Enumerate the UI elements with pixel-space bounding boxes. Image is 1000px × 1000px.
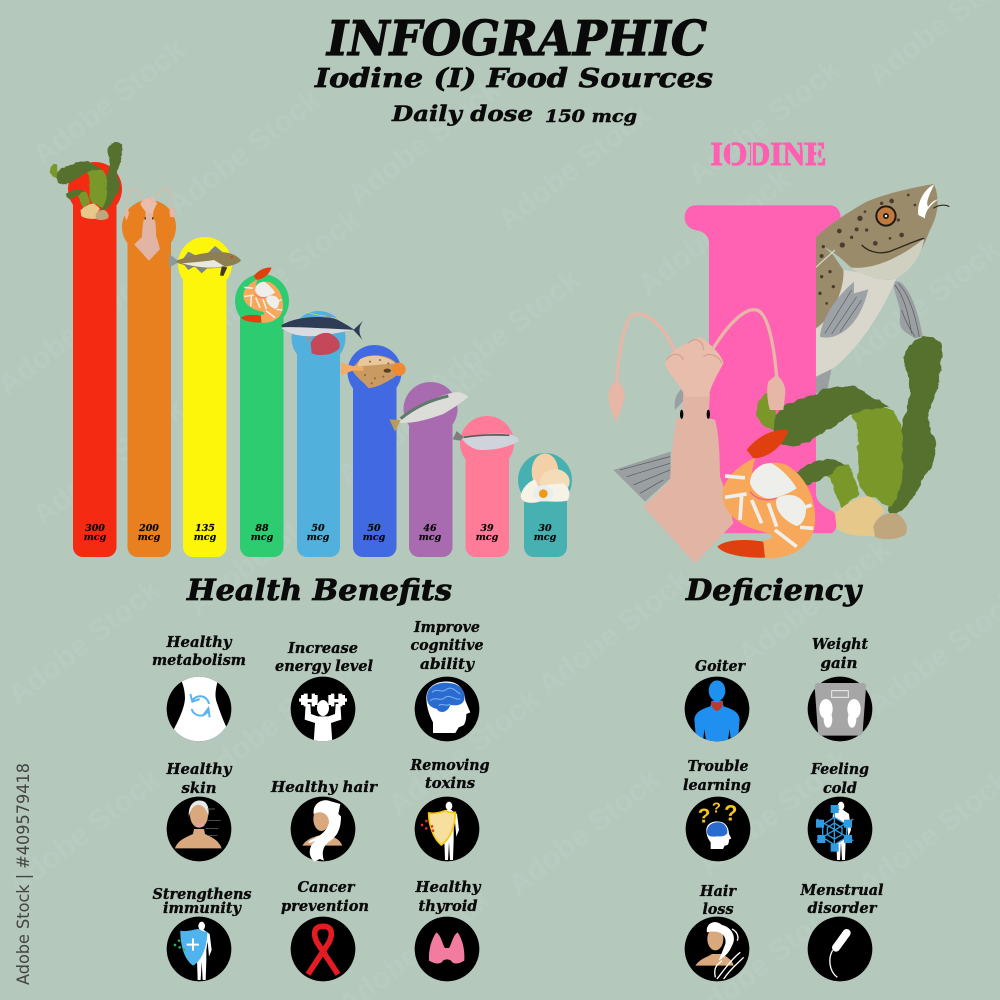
- icon: confused brain: ?: [724, 801, 737, 826]
- icon: woman with hair: [291, 797, 355, 862]
- label: removing toxins: toxins: [425, 775, 475, 792]
- label: hair loss: loss: [702, 901, 734, 918]
- daily dose label: Daily dose: [391, 101, 533, 126]
- label: menstrual disorder: [800, 882, 884, 917]
- icon: awareness ribbon: [291, 917, 355, 981]
- bar chart: iodine content of foods: [68, 162, 572, 557]
- label: trouble learning: [683, 758, 751, 794]
- bar: flounder 50 mcg: mcg: [363, 532, 386, 543]
- icon: small tuna with steak: [282, 312, 363, 355]
- watermark pattern: Adobe Stock: [162, 83, 327, 222]
- label: removing toxins: Removing: [410, 757, 490, 774]
- watermark pattern: Adobe Stock: [182, 483, 347, 622]
- icon: face and skin: [167, 797, 231, 861]
- label: goiter: Goiter: [695, 658, 746, 675]
- bar: mackerel 46 mcg: [404, 382, 458, 557]
- icon: confused brain: ?: [698, 804, 710, 827]
- icon: toxin shield: [415, 797, 479, 861]
- label: trouble learning: learning: [683, 777, 751, 794]
- bar: shrimp 88 mcg: [235, 274, 289, 557]
- bar: flounder 50 mcg: 50: [367, 523, 381, 534]
- label: cancer prevention: Cancer: [298, 879, 356, 896]
- watermark pattern: Adobe Stock: [192, 653, 357, 792]
- label: improve cognitive ability: cognitive: [410, 637, 484, 654]
- label: healthy thyroid: thyroid: [418, 898, 478, 915]
- icon: confused brain: [686, 797, 750, 861]
- watermark pattern: Adobe Stock: [342, 73, 507, 212]
- label: improve cognitive ability: ability: [420, 656, 476, 673]
- watermark pattern: Adobe Stock: [2, 763, 167, 902]
- bar: eggs 30 mcg: [518, 453, 572, 557]
- heading: IODINE: IODINE: [710, 136, 826, 173]
- illustration: letter I with iodine foods: [608, 184, 949, 563]
- bar: tuna 50 mcg: 50: [311, 523, 325, 534]
- label: healthy thyroid: [414, 879, 482, 915]
- bar: seaweed 300 mcg: 300: [85, 523, 105, 534]
- heading: Deficiency: Deficiency: [685, 573, 863, 607]
- label: trouble learning: Trouble: [688, 758, 748, 775]
- bar: mackerel 46 mcg: mcg: [419, 532, 442, 543]
- title: INFOGRAPHIC: [325, 11, 707, 67]
- label: feeling cold: Feeling: [810, 761, 869, 778]
- icon: goiter: [685, 677, 749, 742]
- icon: thyroid: [415, 917, 479, 981]
- label: healthy hair: Healthy hair: [270, 779, 378, 796]
- icon: woman losing hair: [685, 917, 749, 981]
- label: healthy skin: skin: [182, 780, 216, 797]
- watermark pattern: Adobe Stock: [332, 353, 497, 492]
- label: healthy metabolism: metabolism: [152, 652, 246, 669]
- label: improve cognitive ability: [410, 619, 484, 673]
- large squid: [608, 310, 785, 563]
- watermark pattern: Adobe Stock: [202, 203, 367, 342]
- label: healthy metabolism: Healthy: [165, 634, 233, 651]
- watermark pattern: Adobe Stock: [422, 263, 587, 402]
- label: healthy metabolism: [152, 634, 246, 669]
- bar: herring 39 mcg: mcg: [476, 532, 499, 543]
- watermark pattern: Adobe Stock: [382, 683, 547, 822]
- label: hair loss: [699, 883, 737, 918]
- label: strengthens immunity: immunity: [163, 900, 243, 917]
- icon: small mackerel: [389, 392, 468, 432]
- label: strengthens immunity: Strengthens: [152, 886, 252, 903]
- fish tail and lower fin: [613, 387, 687, 502]
- watermark pattern: Adobe Stock: [692, 743, 857, 882]
- watermark pattern: Adobe Stock: [2, 573, 167, 712]
- bar: eggs 30 mcg: 30: [538, 523, 552, 534]
- bar: eggs 30 mcg: mcg: [534, 532, 557, 543]
- watermark pattern: Adobe Stock: [732, 533, 897, 672]
- label: menstrual disorder: disorder: [808, 900, 878, 917]
- bar: shrimp 88 mcg: 88: [255, 523, 269, 534]
- label: weight gain: [812, 636, 868, 672]
- label: hair loss: Hair: [699, 883, 737, 900]
- watermark pattern: Adobe Stock: [27, 33, 192, 172]
- icon: confused brain: ?: [712, 800, 721, 816]
- icon: small squid: [124, 188, 175, 261]
- bar: squid 200 mcg: 200: [138, 523, 159, 534]
- bar: shrimp 88 mcg: mcg: [251, 532, 274, 543]
- panel: health benefits: [152, 619, 490, 981]
- label: healthy skin: [165, 761, 233, 797]
- bar: seaweed 300 mcg: [68, 162, 122, 557]
- label: cancer prevention: [281, 879, 369, 915]
- watermark pattern: Adobe Stock: [682, 53, 847, 192]
- icon: head with brain: [415, 677, 479, 741]
- bar: cod 135 mcg: 135: [195, 523, 215, 534]
- large shrimp: [717, 430, 815, 558]
- label: feeling cold: [810, 761, 869, 797]
- label: increase energy level: [275, 640, 373, 675]
- label: strengthens immunity: [152, 886, 252, 917]
- large seaweed: [757, 336, 942, 539]
- label: increase energy level: Increase: [287, 640, 358, 657]
- bar: mackerel 46 mcg: 46: [423, 523, 437, 534]
- icon: metabolism: [167, 676, 231, 742]
- panel: deficiency: [683, 636, 884, 981]
- label: removing toxins: [410, 757, 490, 792]
- bar: tuna 50 mcg: [292, 311, 346, 557]
- icon: tampon: [808, 917, 872, 981]
- icon: small cod: [169, 246, 241, 276]
- watermark pattern: Adobe Stock: [27, 393, 192, 532]
- icon: weightlifter: [291, 677, 355, 742]
- label: weight gain: Weight: [812, 636, 868, 653]
- watermark pattern: Adobe Stock: [632, 163, 797, 302]
- bar: tuna 50 mcg: mcg: [307, 532, 330, 543]
- label: menstrual disorder: Menstrual: [800, 882, 884, 899]
- icon: bathroom scale: [808, 677, 872, 741]
- bar: squid 200 mcg: [122, 200, 176, 557]
- source credit: Adobe Stock | #409579418: [14, 763, 34, 985]
- large fish: [816, 184, 949, 393]
- bar: herring 39 mcg: 39: [480, 523, 494, 534]
- big letter I: [685, 205, 841, 533]
- label: increase energy level: energy level: [275, 658, 373, 675]
- daily dose value: 150 mcg: [545, 107, 637, 127]
- subtitle: Iodine (I) Food Sources: [314, 64, 713, 94]
- icon: immunity shield: [167, 917, 231, 981]
- icon: small eggs: [521, 453, 570, 503]
- bar: cod 135 mcg: [178, 237, 232, 557]
- label: weight gain: gain: [820, 655, 858, 672]
- icon: small herring: [453, 431, 519, 450]
- bar: flounder 50 mcg: [348, 345, 402, 557]
- bar: cod 135 mcg: mcg: [194, 532, 217, 543]
- icon: cold body with snowflake: [808, 797, 872, 861]
- label: cancer prevention: prevention: [281, 898, 369, 915]
- label: improve cognitive ability: Improve: [413, 619, 480, 636]
- icon: small seaweed: [50, 142, 122, 220]
- bar: squid 200 mcg: mcg: [138, 532, 161, 543]
- watermark pattern: Adobe Stock: [492, 98, 657, 237]
- label: feeling cold: cold: [823, 780, 857, 797]
- label: healthy thyroid: Healthy: [414, 879, 482, 896]
- watermark pattern: Adobe Stock: [532, 563, 697, 702]
- heading: Health Benefits: Health Benefits: [186, 573, 452, 607]
- icon: small shrimp: [241, 267, 283, 323]
- label: healthy skin: Healthy: [165, 761, 233, 778]
- icon: small flounder: [341, 355, 406, 388]
- bar: herring 39 mcg: [460, 416, 514, 557]
- bar: seaweed 300 mcg: mcg: [84, 532, 107, 543]
- watermark pattern: Adobe Stock: [502, 763, 667, 902]
